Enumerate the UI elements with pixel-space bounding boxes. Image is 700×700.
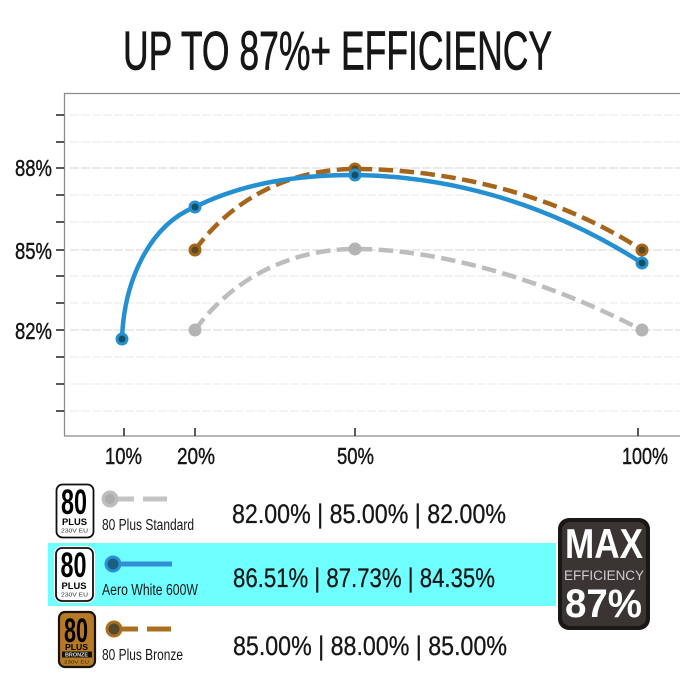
badge: max efficiency 87%: 87% [565, 582, 642, 626]
x-axis labels: 50% [337, 443, 374, 469]
badge: 80 Plus bronze [59, 612, 95, 667]
badge: max efficiency 87%: EFFICIENCY [564, 568, 644, 583]
badge: 80 Plus bronze: 230V EU [64, 660, 89, 664]
x-axis labels: 100% [622, 443, 668, 469]
badge: 80 Plus bronze: 80 [64, 612, 88, 650]
legend name: 80 Plus Standard [102, 517, 194, 534]
y-axis labels: 88% [15, 155, 52, 181]
values: 82.00% | 85.00% | 82.00% [232, 499, 506, 529]
legend key: aero white [104, 556, 172, 572]
y-axis labels: 85% [15, 238, 52, 264]
legend row: Aero White 600W [54, 546, 495, 603]
x-axis labels: 20% [177, 443, 215, 469]
chart: efficiency curves [15, 94, 680, 469]
badge: 80 Plus white: PLUS [62, 517, 87, 528]
values: 85.00% | 88.00% | 85.00% [233, 631, 507, 661]
line: 80 Plus Bronze [188, 162, 648, 256]
badge: 80 Plus white [54, 546, 95, 603]
legend name: 80 Plus Bronze [102, 647, 183, 664]
badge: 80 Plus white: 80 [60, 546, 86, 585]
y-axis labels [15, 155, 52, 344]
highlight band: Aero White 600W [48, 543, 556, 606]
badge: 80 Plus bronze: BRONZE [65, 652, 89, 658]
values: 86.51% | 87.73% | 84.35% [233, 563, 495, 593]
badge: 80 Plus white: 230V EU [61, 592, 89, 598]
legend row: 80 Plus Bronze [59, 612, 507, 667]
badge: 80 Plus white: 230V EU [61, 528, 89, 534]
badge: max efficiency 87%: MAX [565, 520, 643, 567]
legend key: standard [102, 490, 167, 508]
x-axis labels: 10% [105, 443, 142, 469]
badge: 80 Plus white: 80 [61, 483, 87, 522]
legend row: 80 Plus Standard [56, 483, 506, 538]
badge: 80 Plus bronze: PLUS [65, 643, 89, 652]
badge: 80 Plus white [56, 483, 94, 538]
line: Aero White 600W [116, 168, 648, 346]
badge: max efficiency 87% [558, 518, 650, 630]
badge: 80 Plus white: PLUS [62, 581, 86, 592]
y-axis labels: 82% [15, 318, 52, 344]
line: 80 Plus Standard [188, 242, 648, 336]
x-axis labels [105, 443, 668, 469]
legend key: bronze [106, 620, 171, 638]
legend name: Aero White 600W [102, 582, 198, 599]
